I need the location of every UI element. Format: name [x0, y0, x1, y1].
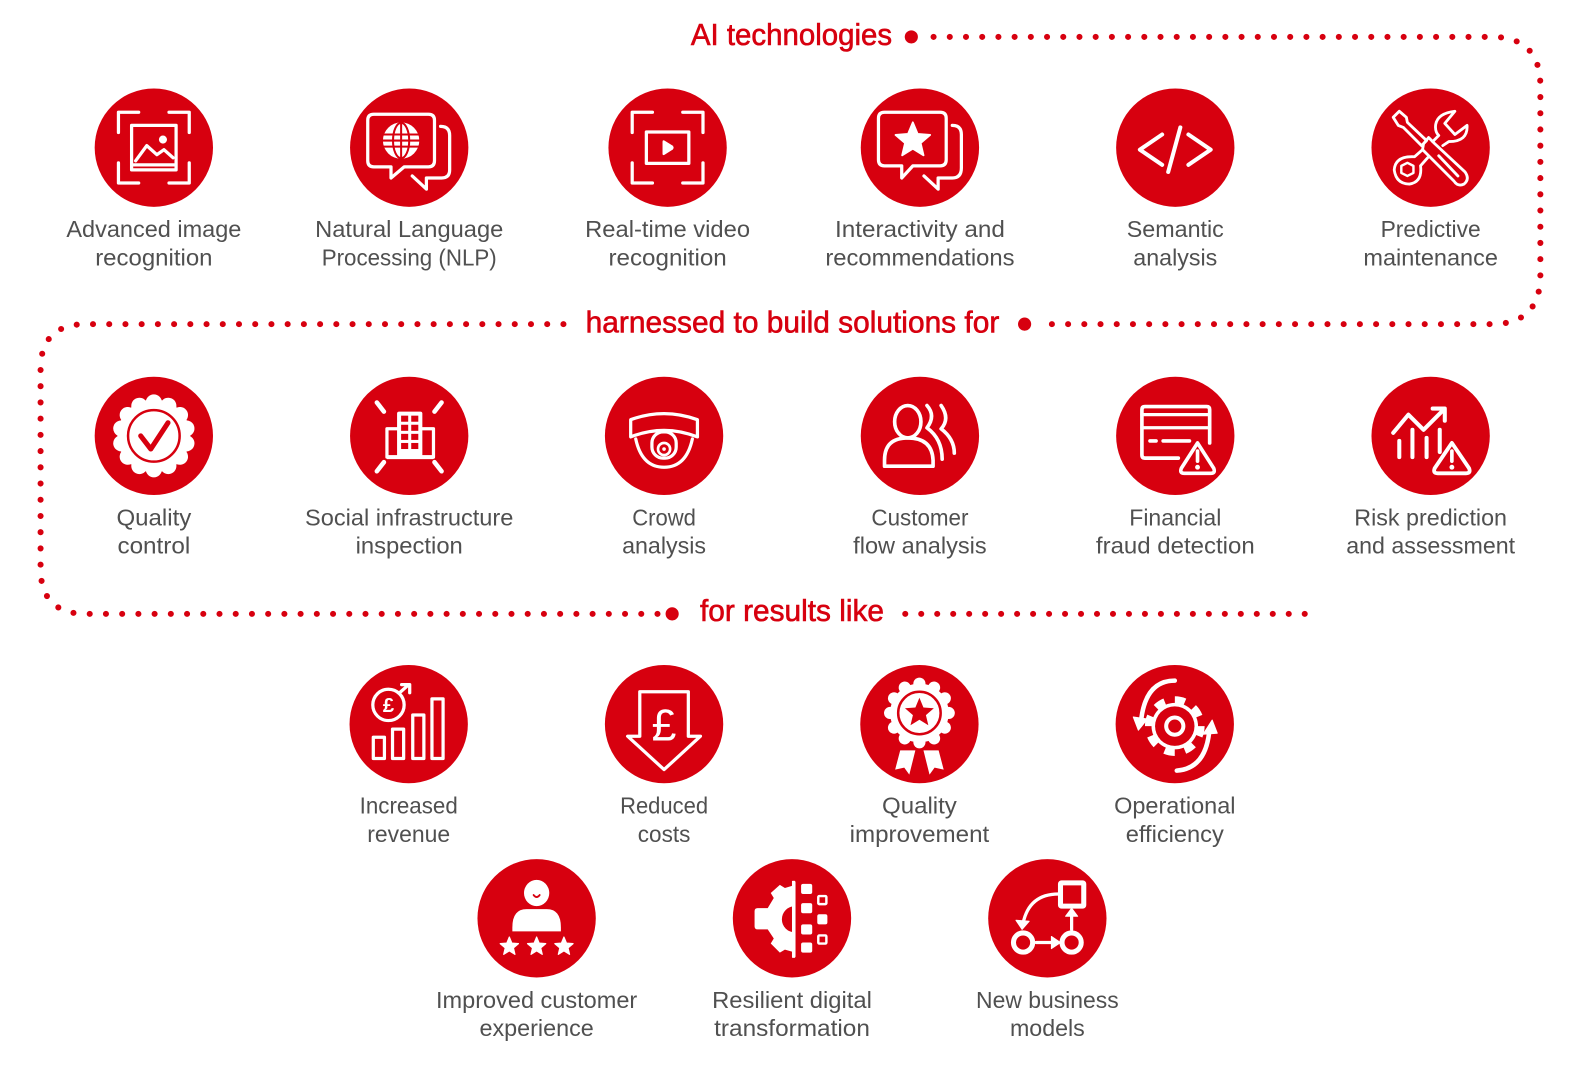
- label: Quality: [116, 504, 192, 530]
- label: [622, 504, 706, 559]
- label: revenue: [367, 821, 450, 847]
- heading: for results like: for results like: [700, 595, 884, 628]
- item: Reduced costs: [605, 665, 723, 847]
- icon: card with warning: [1116, 377, 1234, 495]
- label: and assessment: [1346, 533, 1516, 559]
- icon: globe speech bubbles: [350, 88, 468, 207]
- label: Operational: [1114, 793, 1235, 819]
- item: Increased revenue: [350, 665, 468, 847]
- dotted connector: [41, 37, 1540, 614]
- label: control: [117, 533, 190, 559]
- item: Quality control: [95, 377, 213, 559]
- label: [620, 793, 708, 847]
- icon: revenue bars with pound coin: £: [383, 695, 395, 717]
- label: [66, 216, 241, 270]
- icon: half gear turning digital: [733, 859, 851, 977]
- item: Real-time video recognition: [585, 88, 750, 270]
- label: [116, 504, 192, 559]
- icon: customer with three stars: [477, 859, 596, 977]
- label: [976, 987, 1119, 1041]
- label: costs: [638, 821, 690, 847]
- icon: star speech bubbles: [861, 88, 979, 207]
- label: recognition: [608, 244, 727, 270]
- label: efficiency: [1126, 821, 1224, 847]
- label: [1114, 793, 1235, 847]
- label: Advanced image: [66, 216, 241, 242]
- label: transformation: [714, 1015, 870, 1041]
- label: Resilient digital: [712, 987, 872, 1013]
- item: New business models: [976, 859, 1119, 1041]
- label: [1096, 504, 1255, 559]
- label: Crowd: [632, 504, 696, 530]
- label: [712, 987, 872, 1041]
- icon: business model flow: [988, 859, 1107, 977]
- icon: revenue bars with pound coin: [350, 665, 468, 783]
- label: fraud detection: [1096, 533, 1255, 559]
- item: Customer flow analysis: [853, 377, 987, 559]
- label: [853, 504, 987, 559]
- label: Risk prediction: [1354, 504, 1507, 530]
- item: Natural Language Processing: [315, 88, 503, 270]
- icon: rising chart with warning: [1371, 377, 1490, 495]
- icon: customer with motion arcs: [861, 377, 979, 495]
- icon: video recognition: [608, 88, 727, 207]
- label: analysis: [1133, 244, 1217, 270]
- item: Quality improvement: [850, 665, 990, 847]
- label: [315, 216, 503, 270]
- label: New business: [976, 987, 1119, 1013]
- label: inspection: [356, 533, 463, 559]
- label: analysis: [622, 533, 706, 559]
- label: Increased: [360, 793, 458, 819]
- item: Risk prediction and assessment: [1346, 377, 1516, 559]
- item: Semantic analysis: [1116, 88, 1234, 270]
- connector node: middle: [1018, 318, 1031, 331]
- label: [850, 793, 990, 847]
- heading: AI technologies: AI technologies: [691, 19, 892, 52]
- label: experience: [479, 1015, 594, 1041]
- label: flow analysis: [853, 533, 987, 559]
- item: Financial fraud detection: [1096, 377, 1255, 559]
- item: Predictive maintenance: [1363, 88, 1498, 270]
- label: [1363, 216, 1498, 270]
- icon: pound down arrow: £: [652, 701, 676, 750]
- label: maintenance: [1363, 244, 1498, 270]
- item: Interactivity and recommendations: [825, 88, 1014, 270]
- icon: dome camera: [605, 377, 723, 495]
- item: Advanced image recognition: [66, 88, 241, 270]
- item: Social infrastructure inspection: [305, 377, 513, 559]
- icon: wrench and screwdriver: [1371, 88, 1490, 207]
- heading: harnessed to build solutions for: harnessed to build solutions for: [586, 307, 999, 340]
- label: Interactivity and: [835, 216, 1005, 242]
- label: [360, 793, 458, 847]
- label: Customer: [871, 504, 969, 530]
- label: Semantic: [1127, 216, 1224, 242]
- label: Quality: [882, 793, 957, 819]
- connector node: top: [905, 30, 918, 43]
- item: Improved customer experience: [436, 859, 638, 1041]
- label: Financial: [1129, 504, 1221, 530]
- label: Real-time video: [585, 216, 750, 242]
- icon: pound down arrow: [605, 665, 723, 783]
- item: Crowd analysis: [605, 377, 723, 559]
- icon: image recognition: [95, 88, 213, 207]
- icon: award rosette: [860, 665, 979, 783]
- connector node: bottom: [666, 607, 679, 620]
- label: [1346, 504, 1516, 559]
- label: [825, 216, 1014, 270]
- label: [305, 504, 513, 559]
- icon: code brackets: [1116, 88, 1234, 207]
- label: Reduced: [620, 793, 708, 819]
- label: [585, 216, 750, 270]
- label: Improved customer: [436, 987, 638, 1013]
- label: [1127, 216, 1224, 270]
- label: Social infrastructure: [305, 504, 513, 530]
- label: Predictive: [1381, 216, 1481, 242]
- item: Operational efficiency: [1114, 665, 1235, 847]
- label: [436, 987, 638, 1041]
- label: recommendations: [825, 244, 1014, 270]
- icon: building under inspection: [350, 377, 468, 495]
- label: models: [1010, 1015, 1085, 1041]
- label: recognition: [95, 244, 213, 270]
- label: improvement: [850, 821, 990, 847]
- label: Natural Language: [315, 216, 503, 242]
- icon: quality seal with check: [95, 377, 213, 495]
- item: Resilient digital transformation: [712, 859, 872, 1041]
- label: Processing (NLP): [322, 244, 497, 270]
- icon: gear with circular arrows: [1116, 665, 1234, 783]
